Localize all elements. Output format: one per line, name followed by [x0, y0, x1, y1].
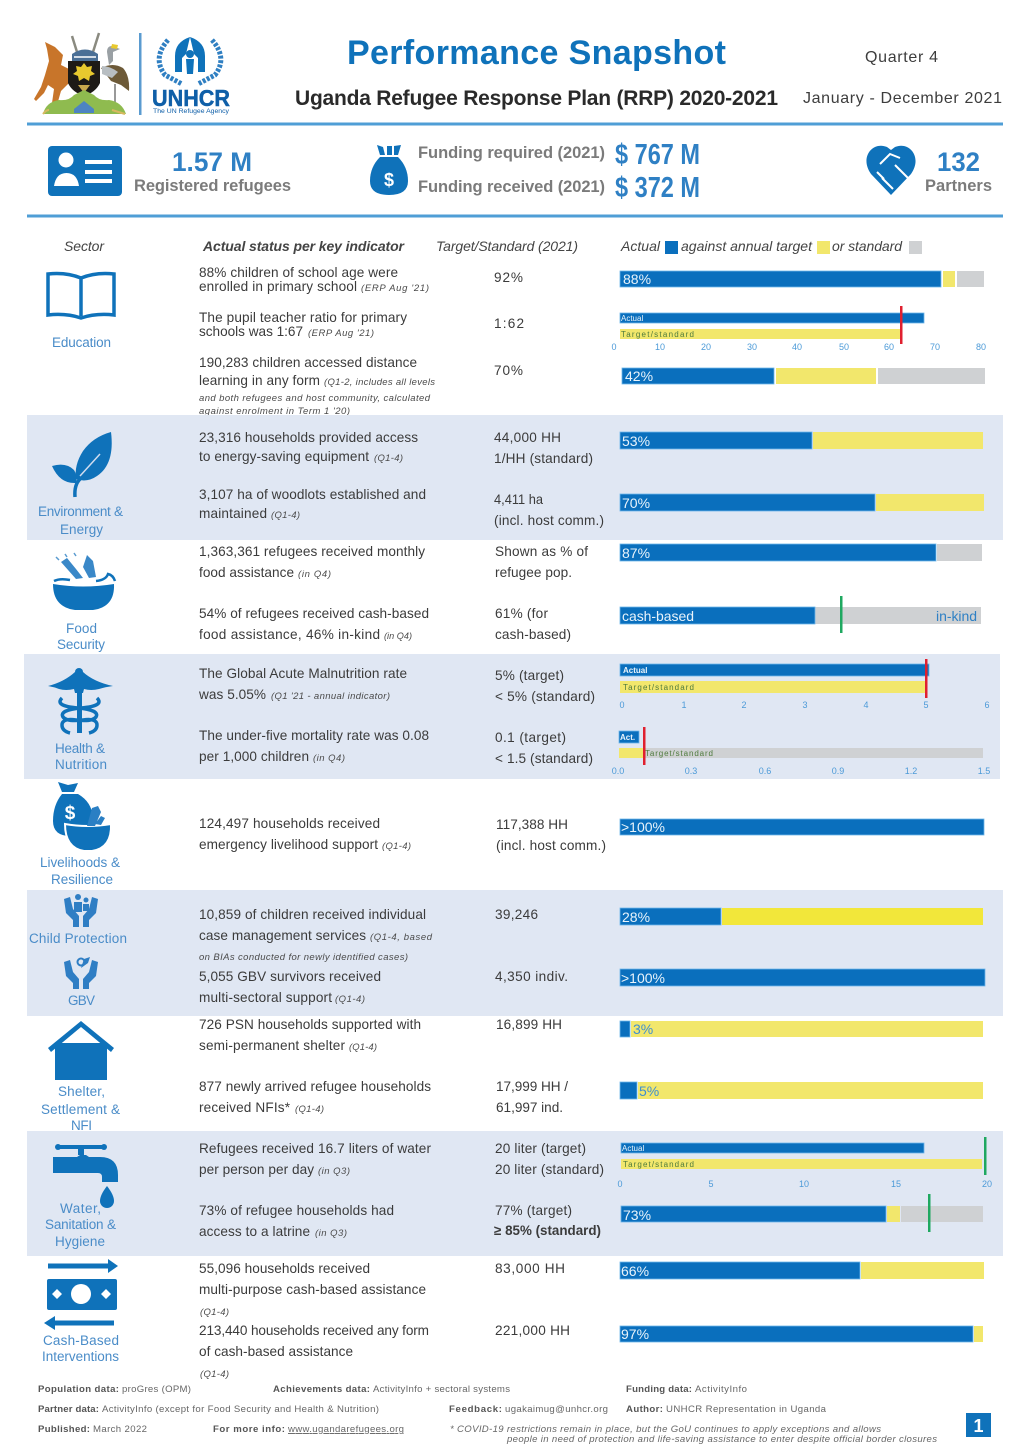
indicator: global acute malnutrition: was 5.05%	[198, 687, 266, 702]
indicator: latrine access: 73%	[623, 1207, 651, 1223]
indicator: distance learning: and both refugees and host community, calculated	[199, 393, 431, 404]
indicator: NFIs: 61,997 ind.	[496, 1100, 563, 1115]
footer: * COVID-19 restrictions remain in place, but the GoU continues to apply exceptions and allows	[450, 1424, 881, 1435]
indicator: latrine access: 73% of refugee households had	[199, 1203, 394, 1218]
indicator: pupil teacher ratio: schools was 1:67	[199, 324, 303, 339]
logo: UNHCR	[152, 37, 230, 115]
indicator: liters of water: per person per day	[199, 1162, 314, 1177]
sector label	[40, 855, 120, 887]
indicator: liters of water: 0	[617, 1179, 623, 1189]
footer: ActivityInfo + sectoral systems	[373, 1384, 510, 1395]
icon: open book	[48, 274, 114, 318]
indicator: global acute malnutrition: 5	[923, 700, 929, 710]
header	[34, 33, 1002, 115]
indicator: woodlots: (Q1-4)	[271, 510, 300, 521]
indicator: liters of water: Target/standard	[623, 1160, 694, 1169]
indicator: pupil teacher ratio: 50	[839, 342, 849, 352]
indicator: emergency livelihood support: (incl. host comm.)	[496, 838, 606, 853]
indicator: distance learning: 190,283 children accessed distance	[199, 355, 417, 370]
indicator: primary enrolment: 88%	[623, 271, 651, 287]
indicator: pupil teacher ratio: 1:62	[494, 316, 524, 331]
legend: Actual	[620, 238, 661, 254]
indicator: monthly food assistance	[199, 544, 982, 580]
panel: Environment and Energy	[27, 415, 1003, 540]
indicator: NFIs: 877 newly arrived refugee households	[199, 1079, 431, 1094]
indicator: global acute malnutrition: 2	[741, 700, 747, 710]
indicator: under-five mortality: The under-five mortality rate was 0.08	[199, 728, 429, 743]
sector label	[38, 504, 123, 537]
reporting quarter: Quarter 4	[865, 49, 938, 66]
legend: or standard	[832, 238, 903, 254]
footer: March 2022	[93, 1424, 147, 1435]
indicator: monthly food assistance: refugee pop.	[495, 565, 572, 580]
indicator: under-five mortality	[199, 727, 990, 776]
indicator: NFIs: (Q1-4)	[295, 1104, 324, 1115]
indicator: primary enrolment	[199, 265, 984, 294]
stat: registered refugees	[134, 147, 291, 195]
indicator: semi-permanent shelter: 3%	[633, 1021, 653, 1037]
sector label: Security	[57, 637, 105, 652]
sector label	[42, 1333, 119, 1364]
indicator: emergency livelihood support: emergency livelihood support	[199, 837, 378, 852]
legend	[620, 238, 922, 254]
indicator: multi-purpose cash: (Q1-4)	[200, 1307, 229, 1318]
stat: funding received: Funding received (2021)	[418, 178, 605, 196]
indicator: under-five mortality: 1.2	[905, 766, 917, 776]
indicator: global acute malnutrition: < 5% (standard)	[495, 689, 595, 704]
indicator: any cash-based assistance: 97%	[621, 1326, 649, 1342]
indicator: liters of water: 10	[799, 1179, 809, 1189]
indicator: liters of water: (in Q3)	[318, 1166, 350, 1177]
indicator: primary enrolment: 88% children of school age were	[199, 265, 398, 280]
logo: UNHCR: UNHCR	[152, 85, 230, 111]
indicator: under-five mortality: 0.9	[832, 766, 844, 776]
indicator: primary enrolment: 92%	[494, 270, 523, 285]
indicator: monthly food assistance: 87%	[622, 545, 650, 561]
indicator: monthly food assistance: food assistance	[199, 565, 294, 580]
indicator: woodlots: 4,411 ha	[494, 492, 543, 507]
icon: money bag with grain bowl	[53, 782, 111, 851]
indicator: global acute malnutrition: 4	[863, 700, 869, 710]
footer: www.ugandarefugees.org	[287, 1424, 404, 1435]
indicator: global acute malnutrition: 3	[802, 700, 808, 710]
indicator: pupil teacher ratio: 70	[930, 342, 940, 352]
footer: For more info:	[213, 1424, 285, 1435]
indicator: primary enrolment: (ERP Aug '21)	[361, 283, 429, 294]
indicator: under-five mortality: 0.3	[685, 766, 697, 776]
indicator: child case management	[199, 907, 983, 963]
indicator: NFIs: received NFIs*	[199, 1100, 291, 1115]
indicator: emergency livelihood support	[199, 816, 984, 853]
column headers: Sector	[64, 238, 105, 254]
panel: Child Protection and GBV	[27, 890, 1003, 1016]
sector label: Environment &	[38, 504, 123, 519]
indicator: emergency livelihood support: (Q1-4)	[382, 841, 411, 852]
indicator: pupil teacher ratio: (ERP Aug '21)	[308, 328, 374, 339]
sector label: Cash-Based	[43, 1333, 119, 1348]
sector label: Child Protection	[29, 931, 127, 946]
indicator: global acute malnutrition: 1	[681, 700, 687, 710]
indicator: global acute malnutrition: 5% (target)	[495, 668, 564, 683]
indicator: monthly food assistance: 1,363,361 refugees received monthly	[199, 544, 425, 559]
footer: ActivityInfo (except for Food Security and Health & Nutrition)	[102, 1404, 379, 1415]
indicator: distance learning: learning in any form	[199, 373, 320, 388]
indicator: energy-saving equipment: (Q1-4)	[374, 453, 403, 464]
indicator: semi-permanent shelter	[199, 1017, 983, 1053]
sector label	[57, 621, 105, 652]
stat: partners: Partners	[925, 177, 992, 195]
icon: hands protecting child	[64, 894, 98, 927]
indicator: multi-purpose cash: 55,096 households received	[199, 1261, 370, 1276]
indicator: distance learning: against enrolment in Term 1 '20)	[199, 406, 350, 417]
panel: Food Security	[53, 544, 982, 652]
legend: against annual target	[681, 238, 813, 254]
footer: UNHCR Representation in Uganda	[666, 1404, 827, 1415]
indicator: NFIs: 5%	[639, 1083, 659, 1099]
stat: funding required: Funding required (2021)	[418, 144, 605, 162]
indicator: under-five mortality: 0.6	[759, 766, 771, 776]
footer: proGres (OPM)	[119, 1384, 191, 1395]
footer: Achievements data:	[273, 1384, 370, 1395]
indicator: any cash-based assistance: 221,000 HH	[495, 1323, 570, 1338]
indicator: distance learning	[199, 355, 985, 417]
indicator: cash-based food assistance: 54% of refugees received cash-based	[199, 606, 429, 621]
indicator: child case management: on BIAs conducted for newly identified cases)	[199, 952, 408, 963]
icon: house	[48, 1021, 114, 1080]
logo: Uganda coat of arms	[34, 33, 129, 114]
column headers	[64, 238, 922, 254]
sector label: Hygiene	[55, 1234, 105, 1249]
indicator: cash-based food assistance	[199, 596, 981, 642]
key figures	[48, 139, 992, 204]
indicator: liters of water: 20 liter (target)	[495, 1141, 586, 1156]
indicator: liters of water: Refugees received 16.7 liters of water	[199, 1141, 431, 1156]
indicator: cash-based food assistance: food assistance, 46% in-kind	[199, 627, 380, 642]
panel: Education	[48, 265, 986, 417]
indicator: latrine access: ≥ 85% (standard)	[494, 1223, 601, 1238]
icon: hands with gender symbol	[64, 957, 98, 989]
indicator: energy-saving equipment: 44,000 HH	[494, 430, 561, 445]
footer: Feedback:	[449, 1404, 502, 1415]
indicator: child case management: 10,859 of children received individual	[199, 907, 426, 922]
indicator: energy-saving equipment: 1/HH (standard)	[494, 451, 593, 466]
indicator: latrine access: 77% (target)	[495, 1203, 572, 1218]
footer: Author:	[626, 1404, 663, 1415]
indicator: global acute malnutrition: The Global Acute Malnutrition rate	[199, 666, 407, 681]
footer: ActivityInfo	[695, 1384, 747, 1395]
stat: registered refugees: Registered refugees	[134, 177, 291, 195]
icon: money bag: $	[384, 170, 394, 190]
indicator: GBV survivors: >100%	[621, 970, 665, 986]
indicator: GBV survivors: multi-sectoral support	[199, 990, 332, 1005]
sector label	[41, 1084, 120, 1133]
panel: Livelihoods and Resilience	[40, 782, 984, 887]
sector label: Sanitation &	[45, 1217, 116, 1232]
sector label: Resilience	[51, 872, 113, 887]
indicator: energy-saving equipment	[199, 430, 983, 466]
sector label: Nutrition	[55, 757, 107, 772]
indicator: latrine access	[199, 1194, 983, 1239]
indicator: woodlots: 3,107 ha of woodlots established and	[199, 487, 426, 502]
icon: money bag	[370, 145, 408, 195]
page number	[966, 1413, 991, 1437]
indicator: emergency livelihood support: 124,497 households received	[199, 816, 380, 831]
indicator: pupil teacher ratio: 20	[701, 342, 711, 352]
indicator: energy-saving equipment: to energy-saving equipment	[199, 449, 369, 464]
indicator: any cash-based assistance: 213,440 households received any form	[199, 1323, 429, 1338]
indicator: child case management: case management services	[199, 928, 366, 943]
indicator: multi-purpose cash	[199, 1261, 984, 1318]
indicator: latrine access: (in Q3)	[315, 1228, 347, 1239]
stat: registered refugees: 1.57 M	[172, 147, 252, 177]
indicator: liters of water: Actual	[622, 1144, 644, 1153]
icon: money bag with grain bowl: $	[65, 803, 76, 824]
icon: refugee ID card	[48, 146, 122, 196]
indicator: emergency livelihood support: 117,388 HH	[496, 817, 568, 832]
icon: banknote with arrows	[44, 1259, 118, 1330]
indicator: NFIs: 17,999 HH /	[496, 1079, 568, 1094]
indicator: liters of water	[199, 1137, 992, 1189]
footer: Partner data:	[38, 1404, 99, 1415]
indicator: liters of water: 20	[982, 1179, 992, 1189]
icon: caduceus	[48, 668, 113, 733]
indicator: distance learning: (Q1-2, includes all levels	[324, 377, 435, 388]
indicator: semi-permanent shelter: 726 PSN households supported with	[199, 1017, 421, 1032]
indicator: cash-based food assistance: 61% (for	[495, 606, 548, 621]
sector label: Interventions	[42, 1349, 119, 1364]
indicator: global acute malnutrition: Actual	[623, 666, 647, 675]
indicator: emergency livelihood support: >100%	[621, 819, 665, 835]
indicator: cash-based food assistance: (in Q4)	[384, 631, 412, 642]
stat: funding required	[418, 139, 700, 171]
logo: UNHCR: The UN Refugee Agency	[153, 109, 229, 115]
sector label: Livelihoods &	[40, 855, 120, 870]
icon: bowl of grain	[53, 553, 115, 610]
indicator: pupil teacher ratio: 0	[611, 342, 617, 352]
indicator: any cash-based assistance: (Q1-4)	[200, 1369, 229, 1380]
sector label: GBV	[68, 993, 95, 1008]
footer: ugakaimug@unhcr.org	[505, 1404, 608, 1415]
indicator: liters of water: 15	[891, 1179, 901, 1189]
indicator: pupil teacher ratio	[199, 306, 986, 352]
indicator: global acute malnutrition: Target/standard	[623, 683, 694, 692]
sector label: Energy	[60, 522, 103, 537]
indicator: pupil teacher ratio: Target/standard	[621, 330, 694, 339]
indicator: distance learning: 42%	[625, 368, 653, 384]
column headers: Actual status per key indicator	[202, 238, 406, 254]
stat: partners	[925, 147, 992, 195]
indicator: monthly food assistance: Shown as % of	[495, 544, 588, 559]
stat: funding received	[418, 172, 700, 204]
indicator: pupil teacher ratio: The pupil teacher ratio for primary	[199, 310, 407, 325]
indicator: primary enrolment: enrolled in primary school	[199, 279, 357, 294]
column headers: Target/Standard (2021)	[436, 238, 578, 254]
stat: funding received: $ 372 M	[615, 172, 700, 204]
indicator: under-five mortality: (in Q4)	[313, 753, 345, 764]
indicator: cash-based food assistance: cash-based	[622, 608, 694, 624]
indicator: monthly food assistance: (in Q4)	[298, 569, 331, 580]
indicator: pupil teacher ratio: Actual	[621, 314, 643, 323]
indicator: distance learning: 70%	[494, 363, 523, 378]
indicator: under-five mortality: 0.0	[612, 766, 624, 776]
sector label	[55, 741, 107, 772]
stat: funding required: $ 767 M	[615, 139, 700, 171]
sector label: Settlement &	[41, 1102, 120, 1117]
subtitle: Uganda Refugee Response Plan (RRP) 2020-2021	[295, 87, 778, 110]
indicator: any cash-based assistance: of cash-based assistance	[199, 1344, 353, 1359]
indicator: woodlots: maintained	[199, 506, 267, 521]
indicator: GBV survivors: (Q1-4)	[335, 994, 365, 1005]
indicator: semi-permanent shelter: semi-permanent shelter	[199, 1038, 345, 1053]
divider	[139, 33, 142, 115]
footer: people in need of protection and life-saving assistance to enter despite official border closures	[506, 1434, 937, 1445]
icon: water tap	[53, 1144, 118, 1208]
indicator: GBV survivors: 5,055 GBV survivors received	[199, 969, 381, 984]
indicator: global acute malnutrition: 6	[984, 700, 990, 710]
indicator: multi-purpose cash: 66%	[621, 1263, 649, 1279]
indicator: pupil teacher ratio: 80	[976, 342, 986, 352]
panel: Shelter, Settlement and NFI	[41, 1017, 983, 1133]
indicator: NFIs	[199, 1079, 983, 1115]
icon: leaf plant	[52, 432, 112, 497]
indicator: semi-permanent shelter: (Q1-4)	[349, 1042, 377, 1053]
indicator: cash-based food assistance: in-kind	[936, 608, 977, 624]
indicator: global acute malnutrition: (Q1 '21 - annual indicator)	[271, 691, 390, 702]
indicator: liters of water: 20 liter (standard)	[495, 1162, 604, 1177]
indicator: multi-purpose cash: multi-purpose cash-based assistance	[199, 1282, 426, 1297]
stat: partners: 132	[937, 147, 980, 177]
indicator: GBV survivors	[199, 969, 985, 1005]
indicator: under-five mortality: 1.5	[978, 766, 990, 776]
indicator: any cash-based assistance	[199, 1323, 983, 1380]
indicator: multi-purpose cash: 83,000 HH	[495, 1261, 565, 1276]
indicator: child case management: 39,246	[495, 907, 538, 922]
indicator: under-five mortality: Target/standard	[645, 749, 713, 758]
indicator: woodlots: 70%	[622, 495, 650, 511]
indicator: semi-permanent shelter: 16,899 HH	[496, 1017, 562, 1032]
title: Performance Snapshot	[347, 34, 726, 72]
sector label: Education	[52, 335, 111, 350]
indicator: GBV survivors: 4,350 indiv.	[495, 969, 568, 984]
indicator: pupil teacher ratio: 60	[884, 342, 894, 352]
sector label	[45, 1201, 116, 1249]
panel: Water, Sanitation and Hygiene	[27, 1131, 1003, 1256]
indicator: energy-saving equipment: 53%	[622, 433, 650, 449]
sector label: Shelter,	[58, 1084, 105, 1099]
footer: Published:	[38, 1424, 90, 1435]
reporting period: January - December 2021	[803, 90, 1002, 107]
sector label: Health &	[55, 741, 105, 756]
indicator: under-five mortality: per 1,000 children	[199, 749, 309, 764]
sector label: Water,	[60, 1201, 101, 1216]
indicator: under-five mortality: 0.1 (target)	[495, 730, 566, 745]
indicator: woodlots: (incl. host comm.)	[494, 513, 604, 528]
footer: Funding data:	[626, 1384, 692, 1395]
indicator: pupil teacher ratio: 10	[655, 342, 665, 352]
icon: partner handshake heart	[866, 146, 916, 195]
indicator: pupil teacher ratio: 40	[792, 342, 802, 352]
footer: Population data:	[38, 1384, 119, 1395]
indicator: pupil teacher ratio: 30	[747, 342, 757, 352]
indicator: liters of water: 5	[708, 1179, 714, 1189]
indicator: cash-based food assistance: cash-based)	[495, 627, 571, 642]
footer	[38, 1384, 991, 1445]
indicator: child case management: 28%	[622, 909, 650, 925]
panel: Health and Nutrition	[24, 654, 1000, 779]
sector label: Food	[66, 621, 97, 636]
sector label: NFI	[71, 1118, 92, 1133]
indicator: latrine access: access to a latrine	[199, 1224, 310, 1239]
indicator: woodlots	[199, 487, 984, 528]
indicator: global acute malnutrition	[198, 659, 990, 710]
indicator: global acute malnutrition: 0	[619, 700, 625, 710]
page number: 1	[973, 1416, 984, 1436]
indicator: under-five mortality: < 1.5 (standard)	[495, 751, 593, 766]
indicator: child case management: (Q1-4, based	[370, 932, 433, 943]
panel: Cash-Based Interventions	[42, 1259, 984, 1380]
indicator: energy-saving equipment: 23,316 households provided access	[199, 430, 418, 445]
indicator: under-five mortality: Act.	[620, 733, 635, 742]
